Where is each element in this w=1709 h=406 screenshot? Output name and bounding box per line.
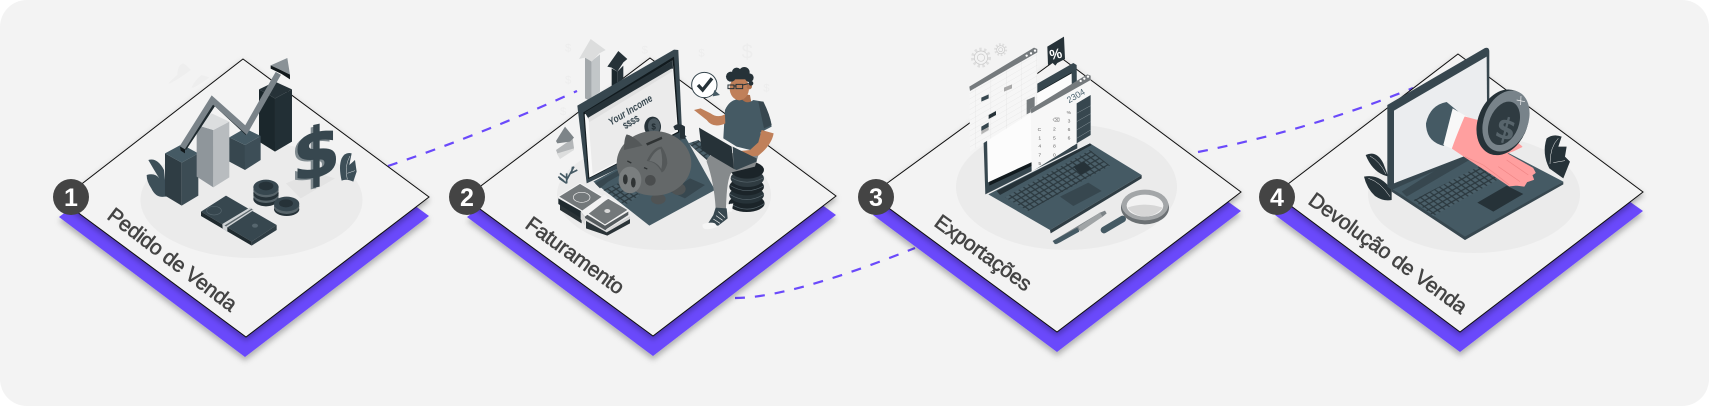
label: Faturamento: Faturamento bbox=[521, 212, 628, 299]
illustration: laptop, spreadsheet and calculator: 3 bbox=[1068, 118, 1071, 124]
step badge 3 bbox=[858, 179, 894, 215]
floor ellipse bbox=[557, 140, 771, 250]
illustration: laptop, spreadsheet and calculator: 6 bbox=[1068, 135, 1071, 141]
illustration: laptop, spreadsheet and calculator bbox=[969, 37, 1169, 244]
illustration: piggy bank, laptop and man: Your Income bbox=[607, 93, 655, 128]
step badge 1 bbox=[53, 179, 89, 215]
panel: Devolução de Venda bbox=[1259, 48, 1643, 352]
label: Devolução de Venda: Devolução de Venda bbox=[1304, 188, 1472, 319]
illustration: piggy bank, laptop and man: $$$$ bbox=[621, 114, 641, 131]
dashed connector 3 to 4 bbox=[1198, 88, 1413, 152]
illustration: laptop, spreadsheet and calculator: 5 bbox=[1038, 161, 1041, 167]
dashed connector 1 to 2 bbox=[388, 91, 577, 166]
diamond card bbox=[1275, 54, 1643, 332]
illustration: laptop, spreadsheet and calculator: 1 bbox=[1038, 135, 1041, 141]
floor ellipse bbox=[1368, 135, 1580, 253]
illustration: piggy bank, laptop and man: $ bbox=[565, 43, 572, 55]
illustration: bars and money: $ bbox=[293, 109, 340, 199]
step badge 2: 2 bbox=[460, 184, 474, 212]
illustration: piggy bank, laptop and man: $ bbox=[651, 123, 656, 132]
illustration: laptop, spreadsheet and calculator: 6 bbox=[1068, 127, 1071, 133]
illustration: laptop, spreadsheet and calculator: ⌫ bbox=[1053, 118, 1060, 124]
panel: Faturamento bbox=[449, 39, 836, 356]
illustration: piggy bank, laptop and man: $ bbox=[565, 74, 572, 86]
illustration: bars and money bbox=[147, 58, 357, 246]
illustration: piggy bank, laptop and man: $ bbox=[560, 106, 567, 118]
illustration: piggy bank, laptop and man: $ bbox=[742, 41, 753, 63]
purple base bbox=[467, 80, 836, 356]
illustration: piggy bank, laptop and man: $ bbox=[642, 44, 649, 56]
illustration: laptop, spreadsheet and calculator: 4 bbox=[1038, 144, 1041, 150]
diamond card bbox=[871, 57, 1241, 332]
step badge 2 bbox=[449, 179, 485, 215]
purple base bbox=[1275, 80, 1643, 352]
illustration: piggy bank, laptop and man: $ bbox=[698, 48, 705, 60]
step badge 4 bbox=[1259, 179, 1295, 215]
illustration: laptop, spreadsheet and calculator: 5 bbox=[1053, 135, 1056, 141]
illustration: laptop, spreadsheet and calculator: % bbox=[1048, 45, 1064, 63]
illustration: laptop, spreadsheet and calculator: 8 bbox=[1053, 144, 1056, 150]
illustration: laptop, hand and coin: $ bbox=[1492, 110, 1520, 148]
illustration: laptop, spreadsheet and calculator: 0 bbox=[1053, 152, 1056, 158]
illustration: laptop, spreadsheet and calculator: C bbox=[1038, 127, 1042, 133]
floor ellipse bbox=[140, 142, 362, 258]
panel: Pedido de Venda bbox=[53, 58, 429, 357]
illustration: laptop, spreadsheet and calculator: 2304 bbox=[1065, 87, 1087, 105]
illustration: laptop, spreadsheet and calculator: 7 bbox=[1038, 152, 1041, 158]
label: Pedido de Venda: Pedido de Venda bbox=[103, 204, 241, 316]
diamond card bbox=[465, 58, 836, 336]
panel: Exportações bbox=[858, 37, 1241, 352]
dashed connector 2 to 3 bbox=[735, 248, 915, 298]
illustration: laptop, spreadsheet and calculator: % bbox=[1067, 110, 1072, 116]
diamond card bbox=[61, 59, 429, 337]
illustration: bars and money: $ bbox=[290, 111, 337, 201]
step badge 1: 1 bbox=[64, 184, 78, 212]
step badge 4: 4 bbox=[1270, 184, 1284, 212]
illustration: piggy bank, laptop and man: $ bbox=[763, 83, 770, 95]
floor ellipse bbox=[956, 124, 1177, 250]
purple base bbox=[59, 80, 429, 357]
step badge 3: 3 bbox=[869, 184, 883, 212]
illustration: laptop, hand and coin bbox=[1364, 48, 1570, 240]
illustration: laptop, spreadsheet and calculator: 2 bbox=[1053, 127, 1056, 133]
illustration: piggy bank, laptop and man bbox=[556, 39, 774, 236]
purple base bbox=[873, 80, 1241, 352]
label: Exportações: Exportações bbox=[930, 210, 1036, 296]
